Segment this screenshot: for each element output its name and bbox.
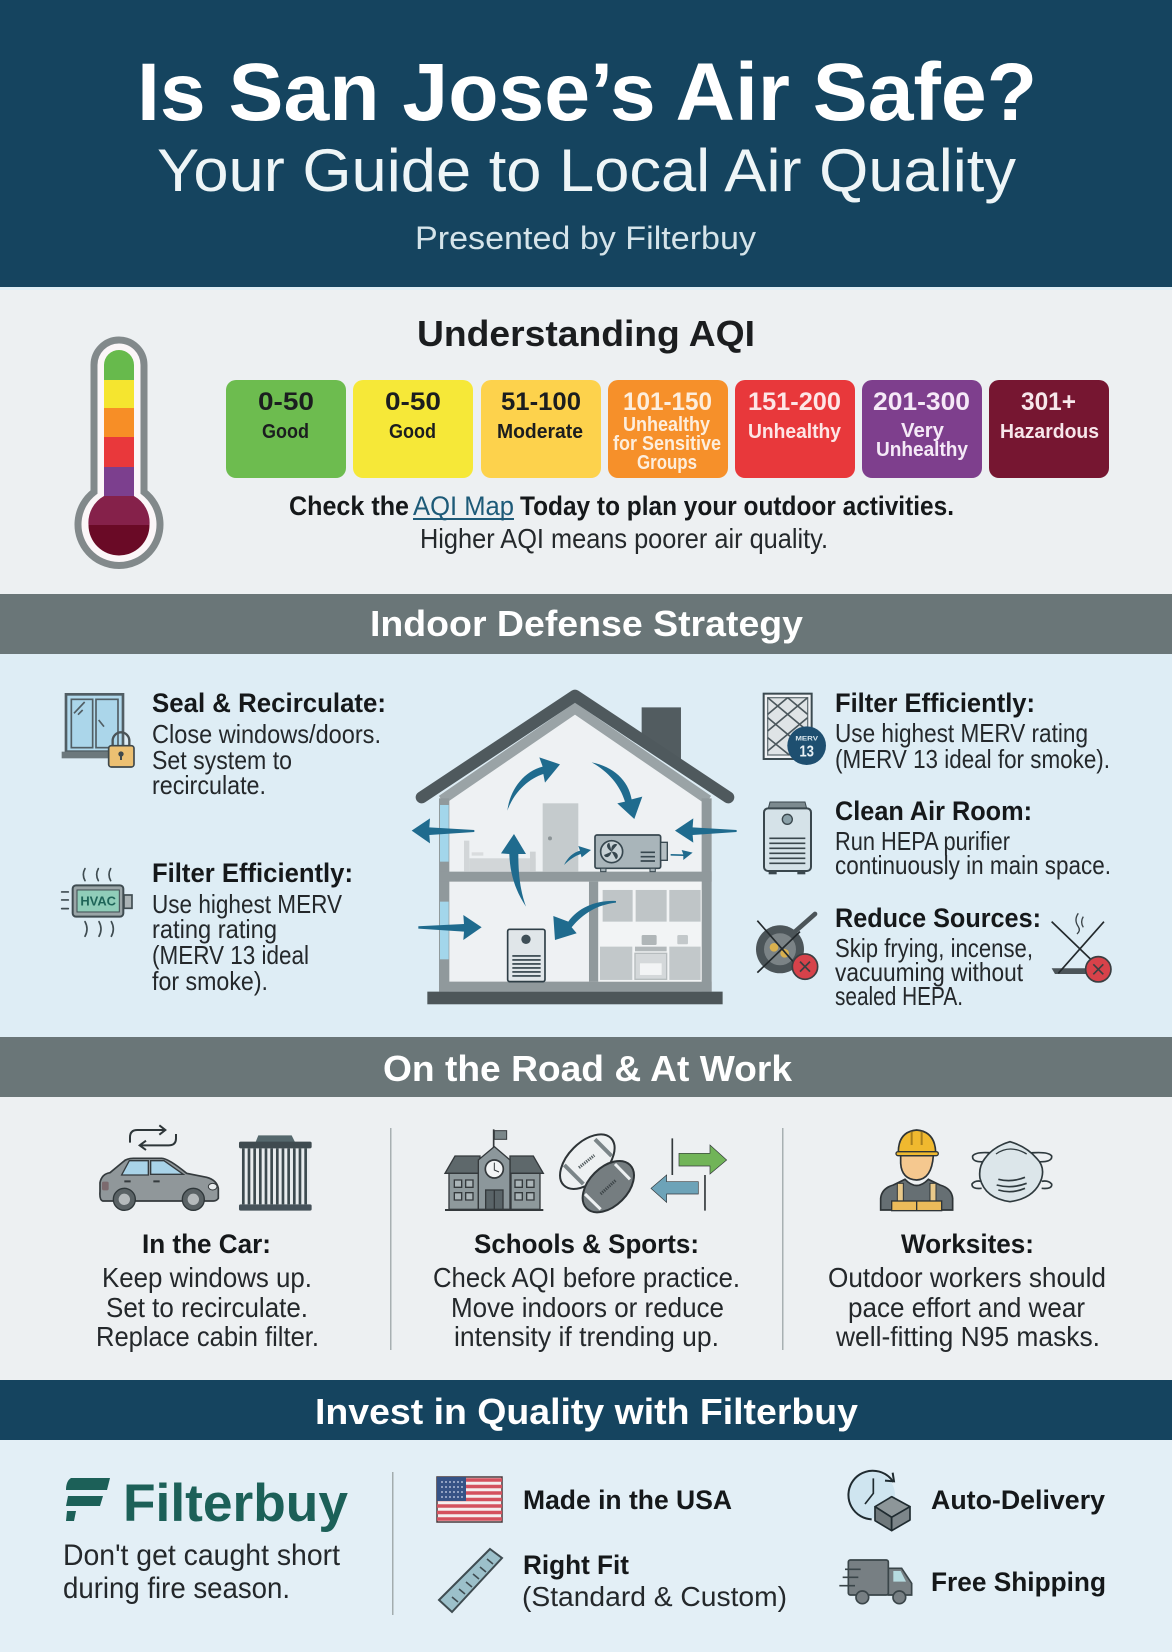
text: AQI note: Higher AQI means poorer air quality. [420,523,828,554]
text: schools and sports: Check AQI before practice. [433,1262,740,1293]
text: AQI map call to action: AQI Map [413,491,514,521]
text: schools and sports: Schools & Sports: [474,1229,699,1259]
panel: indoor defense [0,594,1172,1037]
AQI box: 51-100 moderate [481,380,601,478]
text: free shipping: Free Shipping [931,1567,1106,1597]
AQI box: 51-100 moderate: 51-100 [501,388,581,416]
text: filter efficiently left: Use highest MERV [152,889,343,919]
text: clean air room: continuously in main space. [835,850,1111,880]
AQI box: 0-50 yellow: Good [389,421,436,443]
AQI box: 0-50 green: 0-50 [258,388,314,416]
AQI box: 301+ hazardous: Hazardous [1000,421,1099,443]
icon: construction worker [881,1130,953,1211]
text: reduce sources: sealed HEPA. [835,981,963,1011]
banner: invest in quality [0,1380,1172,1440]
AQI box: 101-150 sensitive groups: Unhealthy [623,414,711,436]
text: worksites: well-fitting N95 masks. [835,1321,1100,1352]
AQI box: 0-50 green [226,380,346,478]
text: worksites: Worksites: [901,1229,1034,1259]
bedroom furniture [464,803,578,872]
icon: HEPA purifier [764,802,811,874]
icon: window with lock [62,694,134,767]
AQI box: 201-300 very unhealthy: 201-300 [873,388,970,416]
presenter line: Presented by Filterbuy [415,220,756,256]
icon: crossed-out frying pan [756,914,818,979]
text: fire season tagline: during fire season. [63,1572,290,1605]
text: in the car: Replace cabin filter. [96,1321,319,1352]
text: AQI map call to action [289,491,954,521]
icon: US flag [437,1477,502,1522]
AQI box: 101-150 sensitive groups: Groups [637,452,697,474]
icon: MERV filter: 13 [799,744,814,761]
AQI box: 0-50 yellow [353,380,473,478]
text: worksites: Outdoor workers should [828,1262,1106,1293]
icon: thermometer [78,340,160,565]
house diagram [412,696,737,1004]
icon: clock and box [848,1471,910,1531]
AQI scale [226,380,1109,478]
icon: N95 mask [972,1142,1052,1202]
icon: HVAC unit [62,869,132,936]
text: in the car: Set to recirculate. [106,1292,308,1323]
text: schools and sports: intensity if trending up. [454,1321,719,1352]
text: auto-delivery: Auto-Delivery [931,1485,1105,1515]
air purifier [508,929,545,982]
text: in the car [96,1229,319,1352]
text: filter efficiently left: for smoke). [152,966,268,996]
AQI box: 151-200 unhealthy: Unhealthy [748,421,842,443]
icon: ruler [439,1549,502,1612]
AQI box: 301+ hazardous [989,380,1109,478]
text: made in the USA: Made in the USA [523,1485,732,1515]
icon: car with recirculate arrows [100,1125,218,1210]
icon: crossed-out incense [1052,913,1111,982]
airflow arrows [412,757,737,940]
text: clean air room: Clean Air Room: [835,796,1032,826]
text: right fit: (Standard & Custom) [522,1581,787,1612]
text: worksites: pace effort and wear [848,1292,1085,1323]
text: seal and recirculate [152,688,386,800]
text: in the car: Keep windows up. [102,1262,312,1293]
AQI box: 201-300 very unhealthy [862,380,982,478]
panel: understanding AQI [0,287,1172,594]
text: clean air room: Run HEPA purifier [835,826,1010,856]
text: right fit [522,1550,787,1612]
panel: header [0,0,1172,287]
logo wordmark: Filterbuy [123,1474,349,1533]
text: fire season tagline: Don't get caught short [63,1539,341,1572]
text: filter efficiently right: Use highest MERV rating [835,718,1088,748]
text: filter efficiently right [835,688,1110,774]
text: schools and sports [433,1229,740,1352]
text: reduce sources: Reduce Sources: [835,903,1041,933]
text: AQI map call to action: Check the [289,491,409,521]
AC unit [595,835,667,872]
house structure [422,696,728,1004]
text: AQI map call to action: Today to plan your outdoor activities. [520,491,954,521]
heading: understanding AQI: Understanding AQI [417,313,755,354]
icon: delivery truck [839,1560,912,1604]
text: fire season tagline [63,1539,341,1605]
banner: indoor defense strategy: Indoor Defense Strategy [370,603,803,644]
title: Is San Jose’s Air Safe? [137,47,1037,138]
AQI box: 201-300 very unhealthy: Unhealthy [876,439,969,461]
text: seal and recirculate: Set system to [152,745,292,775]
icon: MERV filter [764,694,826,765]
text: filter efficiently left [152,858,353,996]
text: reduce sources: vacuuming without [835,957,1024,987]
banner: on the road: On the Road & At Work [383,1048,793,1089]
AQI box: 0-50 yellow: 0-50 [385,388,441,416]
text: seal and recirculate: Close windows/doors. [152,719,381,749]
text: seal and recirculate: recirculate. [152,770,266,800]
text: seal and recirculate: Seal & Recirculate: [152,688,386,718]
text: right fit: Right Fit [523,1550,629,1580]
AQI box: 301+ hazardous: 301+ [1021,388,1076,416]
banner: indoor defense strategy [0,594,1172,654]
kitchen [598,882,702,982]
icon: cabin filter [239,1135,312,1211]
subtitle: Your Guide to Local Air Quality [157,137,1016,204]
AQI box: 101-150 sensitive groups: 101-150 [623,388,712,416]
AQI box: 101-150 sensitive groups: for Sensitive [613,433,721,455]
icon: direction arrows [651,1138,727,1211]
text: filter efficiently right: Filter Efficiently: [835,688,1035,718]
text: filter efficiently left: (MERV 13 ideal [152,940,309,970]
banner: invest in quality: Invest in Quality with Filterbuy [315,1391,858,1432]
AQI box: 101-150 sensitive groups [608,380,728,478]
text: schools and sports: Move indoors or reduce [451,1292,724,1323]
text: filter efficiently left: Filter Efficiently: [152,858,353,888]
icon: footballs [550,1124,644,1222]
icon: school [445,1129,543,1210]
text: reduce sources [835,903,1041,1011]
text: filter efficiently right: (MERV 13 ideal for smoke). [835,744,1110,774]
AQI box: 201-300 very unhealthy: Very [901,420,945,442]
AQI box: 151-200 unhealthy: 151-200 [748,388,841,416]
text: worksites [828,1229,1106,1352]
AQI box: 0-50 green: Good [262,421,309,443]
text: clean air room [835,796,1111,880]
text: reduce sources: Skip frying, incense, [835,933,1033,963]
icon: Filterbuy logo mark [66,1478,110,1521]
banner: on the road [0,1037,1172,1097]
AQI box: 51-100 moderate: Moderate [497,421,583,443]
AQI box: 151-200 unhealthy [735,380,855,478]
text: filter efficiently left: rating rating [152,914,277,944]
panel: invest in quality [0,1380,1172,1652]
icon: MERV filter: MERV [795,736,819,743]
icon: HVAC unit: HVAC [80,895,116,909]
text: in the car: In the Car: [142,1229,271,1259]
panel: on the road and at work [0,1037,1172,1381]
